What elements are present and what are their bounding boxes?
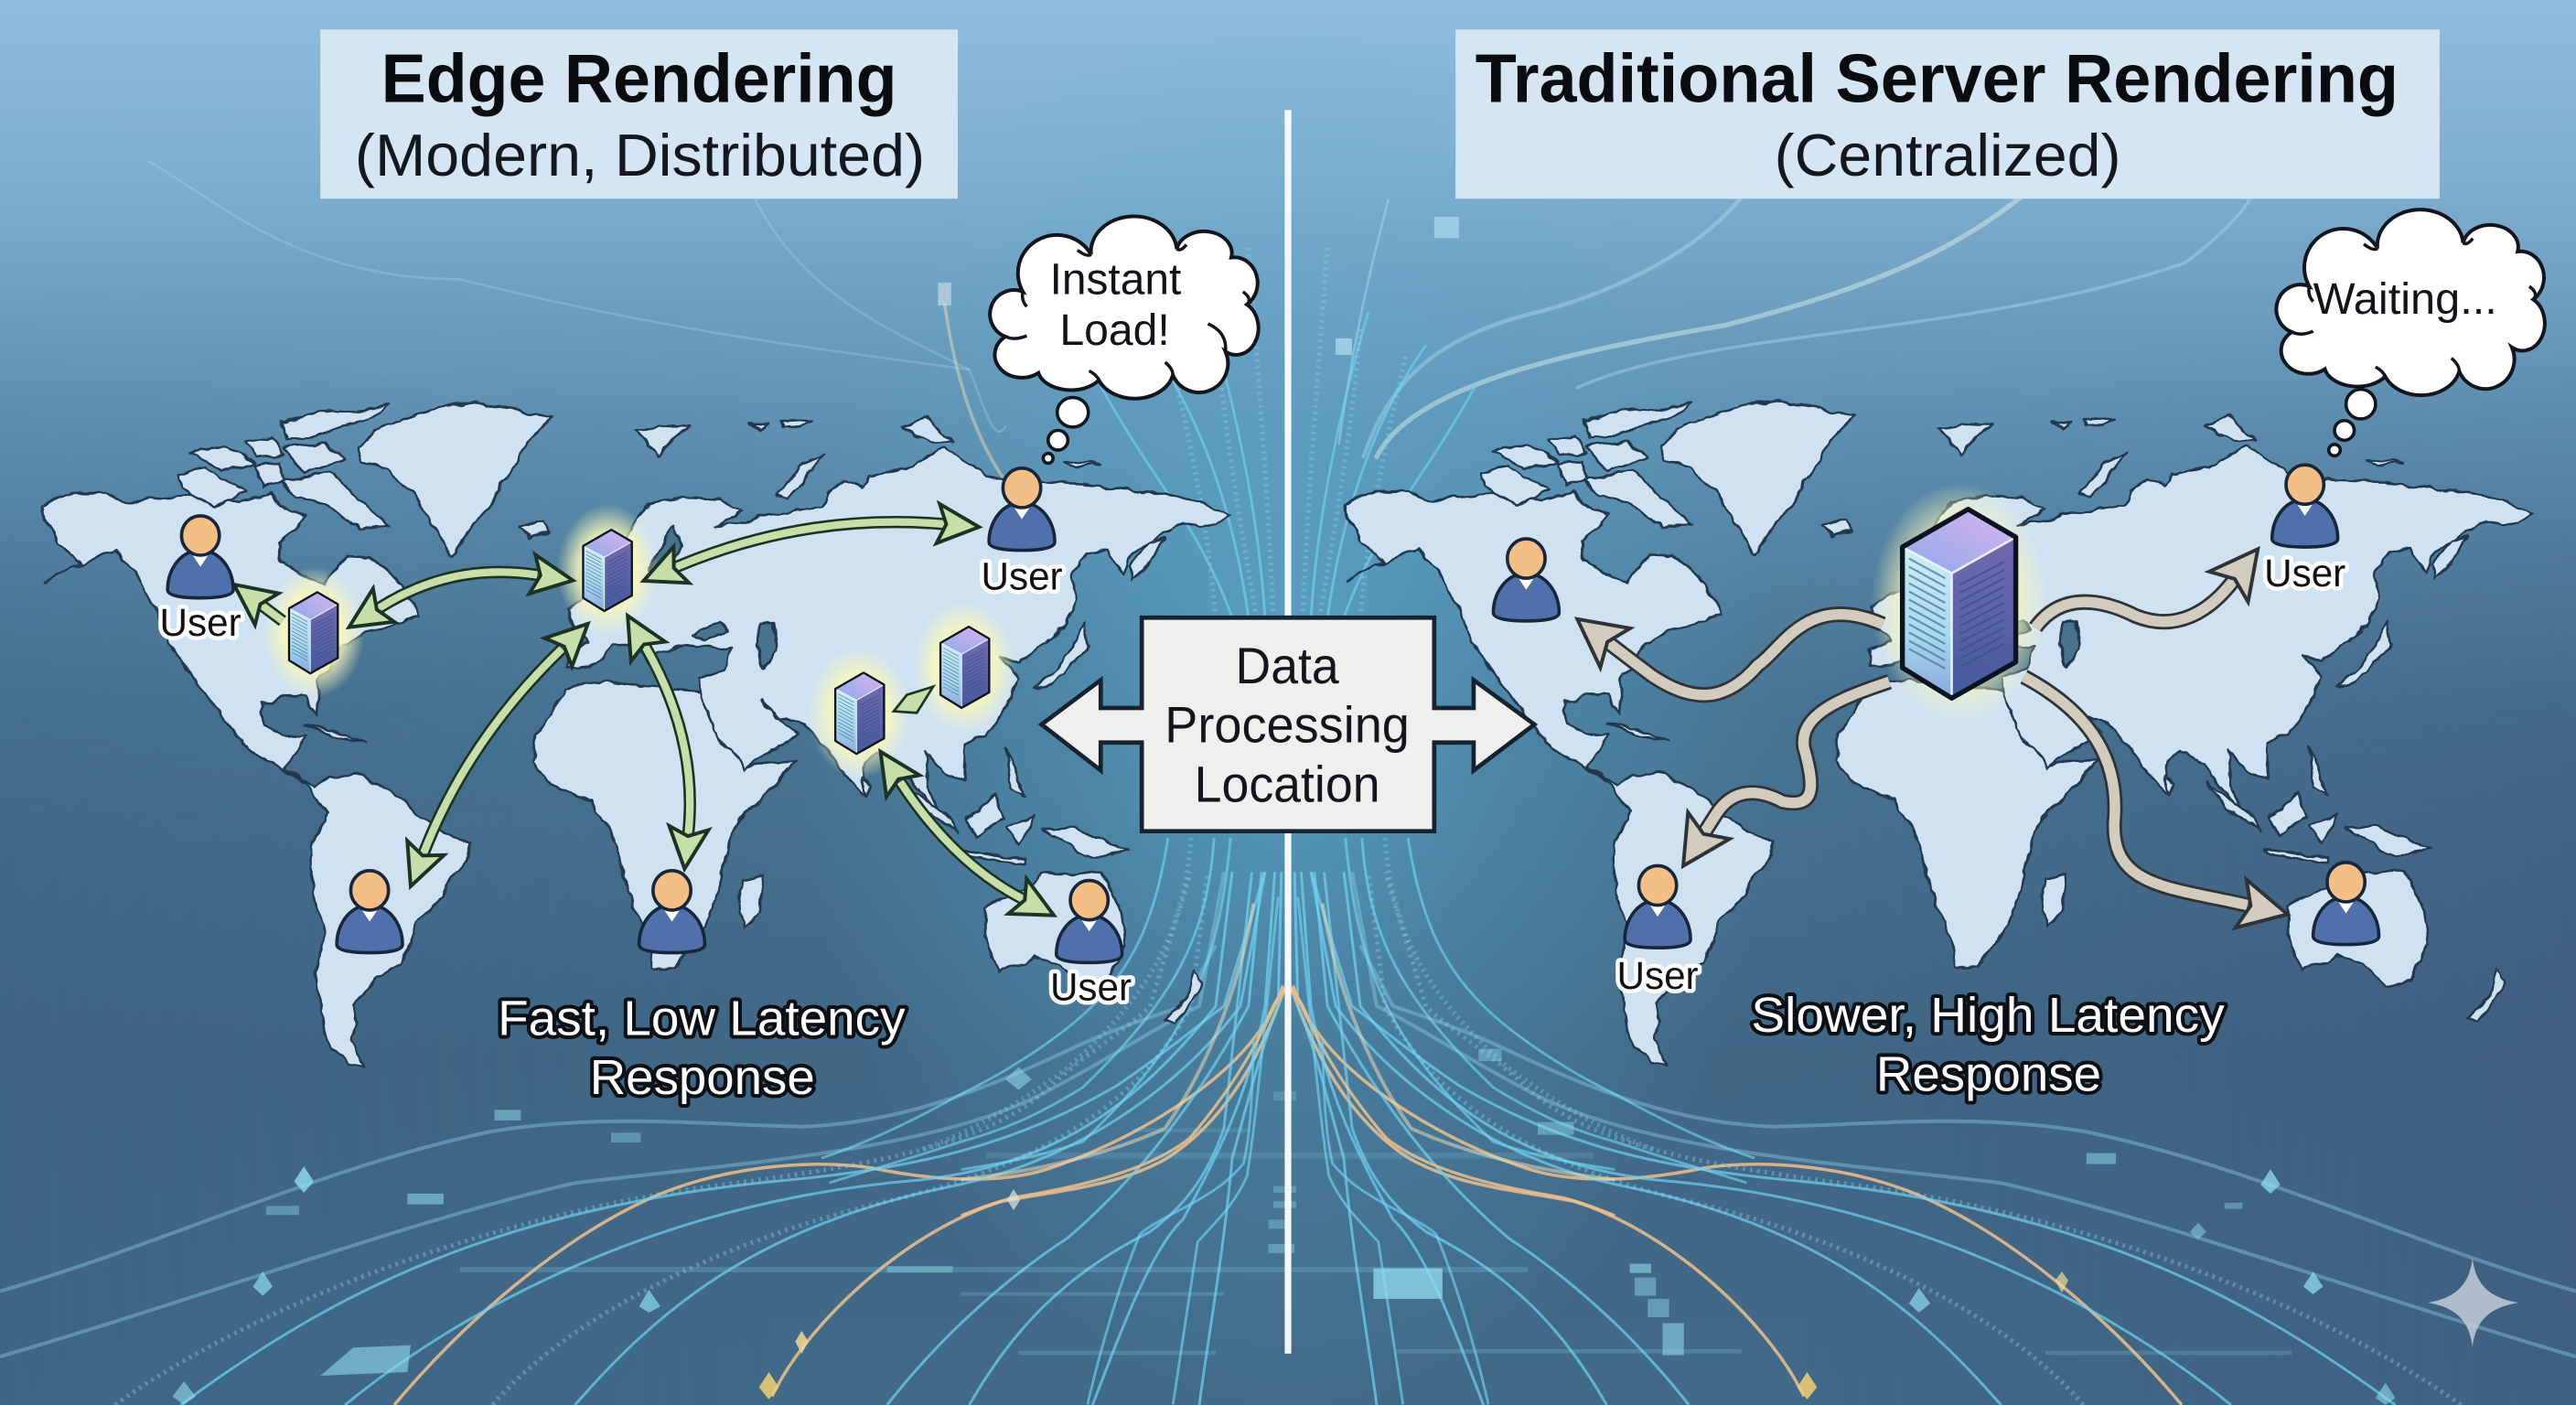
icon: user russia right — [2272, 465, 2338, 547]
subheading: centralized: (Centralized) — [1775, 122, 2121, 188]
callout: data processing location — [1042, 617, 1534, 831]
icon: edge server europe — [583, 530, 632, 611]
fan lines left — [821, 246, 1283, 1404]
heading: edge rendering: Edge Rendering — [381, 39, 897, 116]
icon: user north america left — [167, 516, 233, 598]
bubble text: Load! — [1059, 306, 1170, 355]
label: user north america left: User — [160, 601, 242, 644]
caption: slower high latency: Response — [1876, 1046, 2101, 1101]
bubble text: Instant — [1050, 254, 1182, 304]
caption: fast low latency: Response — [590, 1050, 815, 1105]
arrows: edge panel green bidirectional — [263, 522, 1022, 898]
caption: fast low latency: Fast, Low Latency — [498, 991, 906, 1046]
icon: edge server north america — [289, 592, 338, 673]
thought bubble: waiting — [2276, 209, 2545, 456]
callout text: Data — [1236, 638, 1339, 694]
label: user russia left: User — [982, 555, 1063, 598]
callout text: Processing — [1165, 697, 1410, 754]
icon: central origin server — [1903, 509, 2016, 698]
bubble text: Waiting... — [2313, 274, 2497, 324]
server glows — [263, 483, 2049, 778]
icon: edge server china — [940, 627, 989, 708]
icon: user australia right — [2313, 863, 2378, 945]
arrows: traditional panel grey long routes — [1610, 582, 2248, 906]
icon: user africa left — [639, 871, 704, 953]
icon: user australia left — [1057, 881, 1122, 962]
label: user russia right: User — [2264, 552, 2345, 595]
icon: edge server india — [835, 672, 884, 754]
icon: user south america right — [1625, 865, 1690, 948]
thought bubble: instant load — [990, 216, 1259, 463]
panel: traditional rendering header — [1455, 29, 2440, 198]
icon: user south america left — [337, 871, 402, 953]
panel: edge rendering header — [320, 29, 958, 198]
bubble text — [1050, 254, 1182, 355]
label: user south america right: User — [1617, 954, 1699, 997]
subheading: modern distributed: (Modern, Distributed) — [355, 122, 925, 188]
flare lines left — [0, 872, 1284, 1405]
flare lines right — [1292, 872, 2576, 1405]
caption: slower high latency — [1751, 988, 2225, 1101]
callout text — [1165, 638, 1410, 812]
central divider line — [1284, 110, 1292, 1354]
world map: right panel — [1344, 399, 2535, 1065]
heading: traditional server rendering: Traditional Server Rendering — [1476, 39, 2399, 116]
fan lines right — [1293, 246, 1755, 1404]
icon: user north america right — [1493, 539, 1559, 621]
world map: left panel — [41, 401, 1232, 1067]
icon: sparkle watermark — [2428, 1259, 2518, 1347]
caption: slower high latency: Slower, High Latency — [1751, 988, 2225, 1043]
icon: user russia left — [989, 468, 1055, 551]
caption: fast low latency — [498, 991, 906, 1105]
label: user australia left: User — [1050, 966, 1132, 1009]
callout text: Location — [1195, 756, 1380, 812]
